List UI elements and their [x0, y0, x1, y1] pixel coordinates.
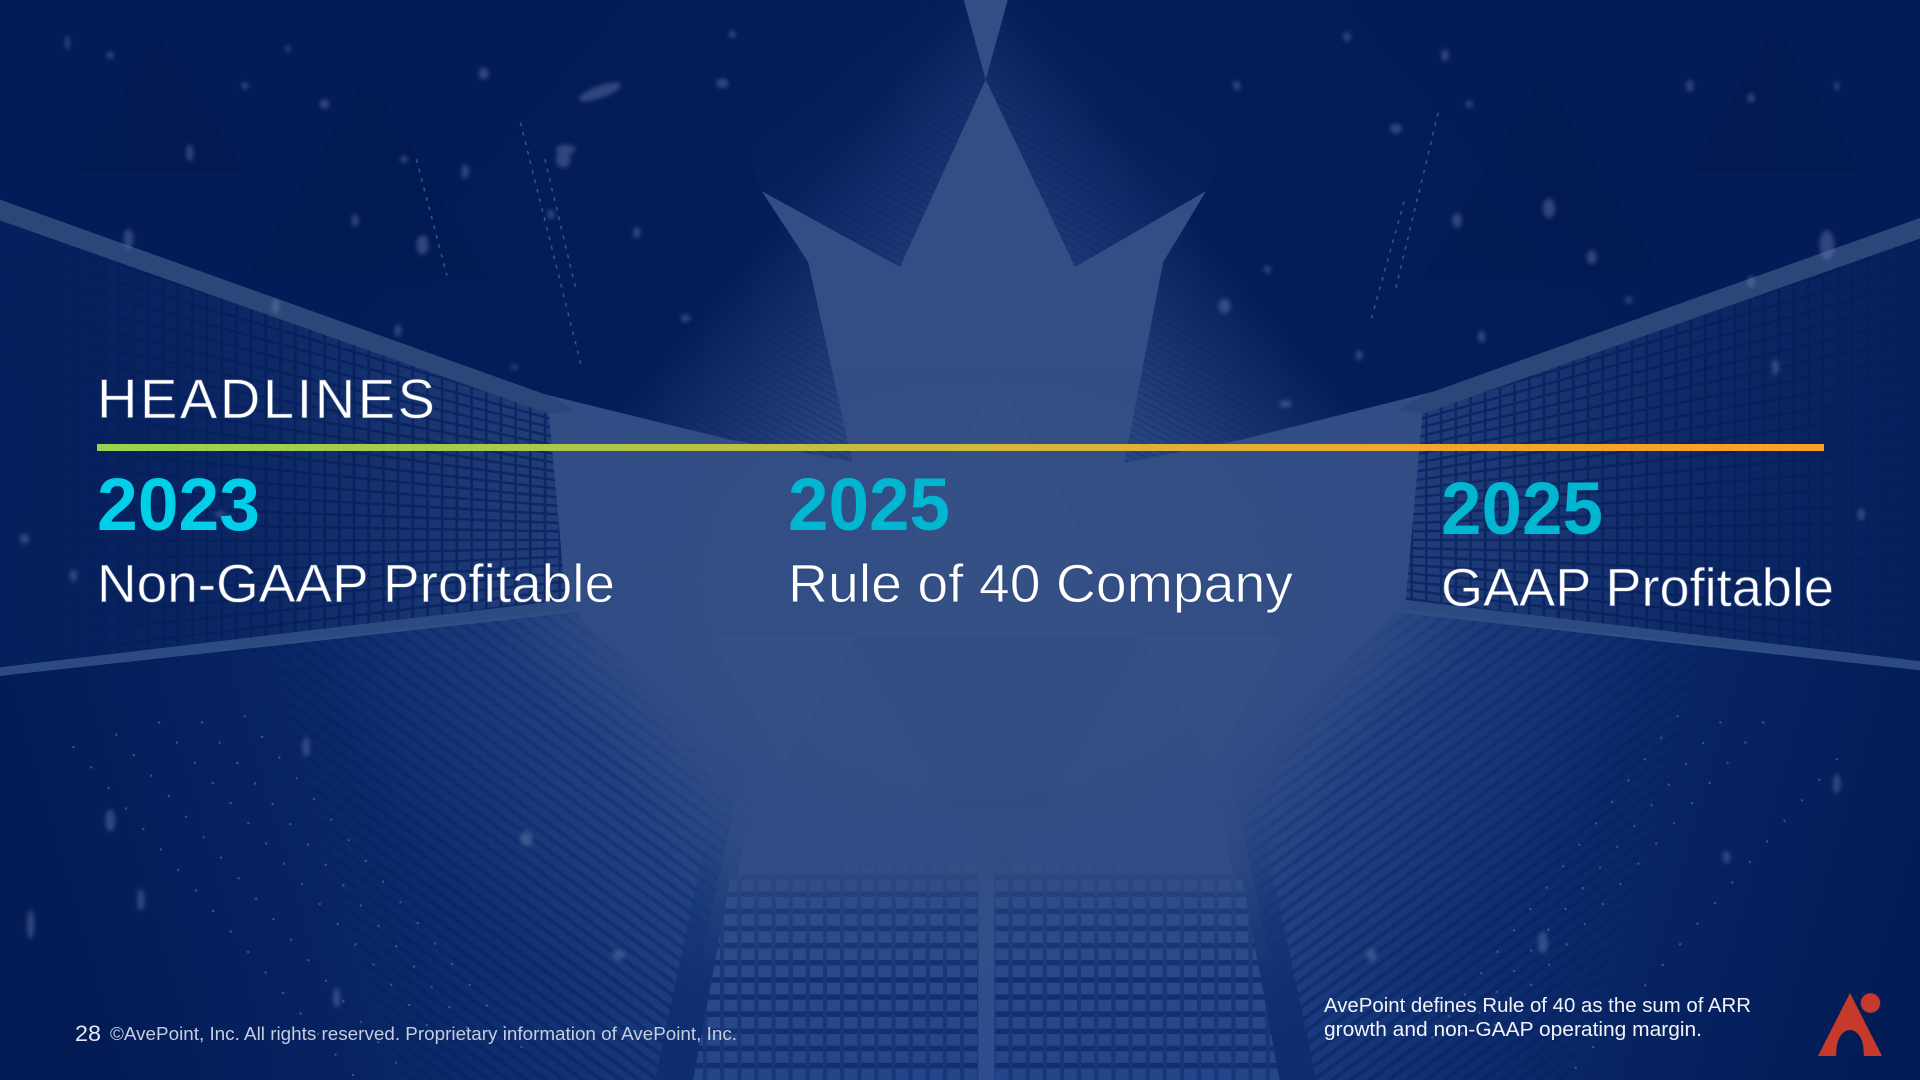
darker triangle facets in sky: [73, 24, 1861, 282]
year 2023: 2023: [97, 463, 260, 546]
year 2025: 2025: [788, 463, 950, 546]
upper-left dark towers: [0, 0, 986, 462]
lower-right building: [1163, 600, 1920, 1080]
bottom-centre left tower: [693, 861, 978, 1080]
label rule of 40 company: Rule of 40 Company: [788, 554, 1293, 614]
bottom-centre light column: [978, 861, 994, 1080]
footnote: Rule of 40 definition: AvePoint defines Rule of 40 as the sum of ARR: [1324, 995, 1751, 1017]
copyright notice: ©AvePoint, Inc. All rights reserved. Proprietary information of AvePoint, Inc.: [110, 1024, 737, 1044]
footnote: Rule of 40 definition: [1324, 995, 1751, 1041]
bottom-centre right tower: [994, 861, 1280, 1080]
icon: AvePoint logo: [1818, 992, 1882, 1056]
footer: page number and copyright: [75, 1021, 737, 1046]
year 2025: 2025: [1441, 467, 1603, 550]
footnote: Rule of 40 definition: growth and non-GAAP operating margin.: [1324, 1019, 1702, 1041]
gradient divider rule: [97, 444, 1824, 451]
milestone: 2025 GAAP Profitable: [1441, 467, 1834, 618]
page number: 28: [75, 1021, 101, 1046]
central glow: [0, 367, 1920, 1080]
faint triangle facets: [710, 380, 1286, 888]
left building face: [0, 200, 986, 678]
heading: HEADLINES: HEADLINES: [97, 367, 435, 430]
label GAAP profitable: GAAP Profitable: [1441, 558, 1834, 618]
label non-GAAP profitable: Non-GAAP Profitable: [97, 554, 615, 614]
building dots: [73, 716, 1837, 1078]
fine streak lights: [416, 110, 1439, 367]
milestone: 2025 Rule of 40 Company: [788, 463, 1293, 614]
lower-left building: [0, 600, 808, 1080]
right building face: [986, 200, 1920, 678]
upper-right dark towers: [986, 0, 1920, 463]
milestone: 2023 Non-GAAP Profitable: [97, 463, 615, 614]
